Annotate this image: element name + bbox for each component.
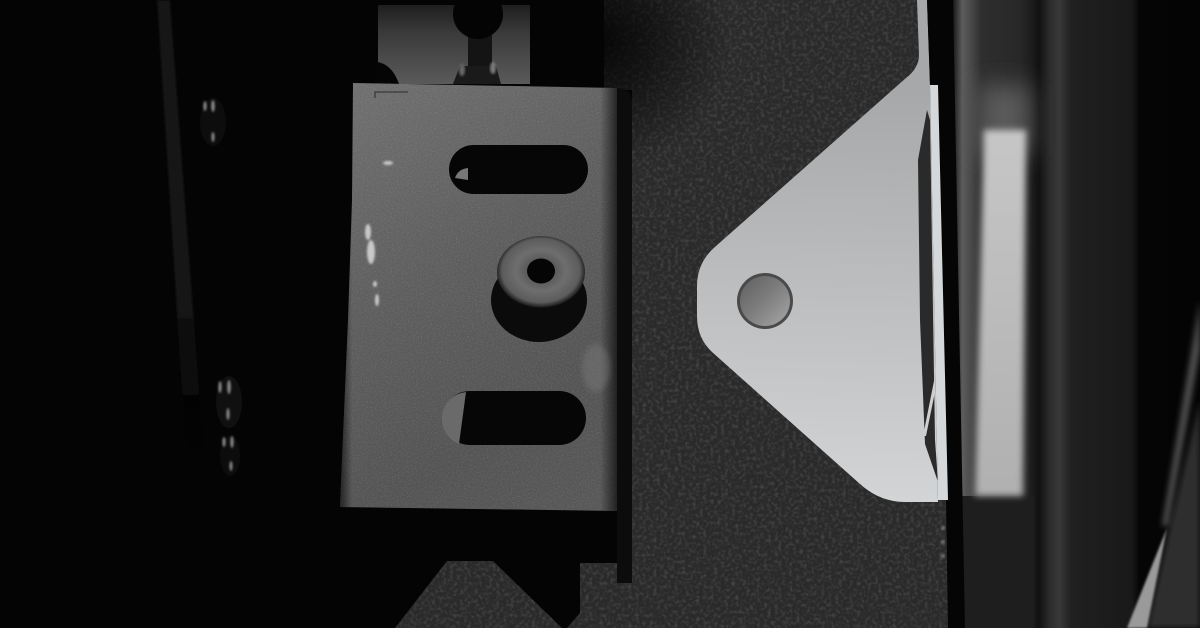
folded silver edge	[930, 85, 948, 500]
bracket face	[335, 80, 625, 515]
textured wall	[390, 0, 950, 628]
plate recess	[918, 110, 938, 482]
silver triangular plate	[697, 0, 938, 502]
black bracket: main plate	[340, 83, 625, 511]
column lower dim area	[958, 496, 1034, 628]
upper slot	[449, 145, 588, 194]
black shadow and lower bracket tab	[0, 0, 632, 628]
column highlight panel	[975, 130, 1026, 496]
right vertical column	[948, 0, 1200, 628]
rubber bushing	[491, 236, 587, 342]
recess glint	[923, 376, 935, 436]
plate scuff marks	[365, 161, 393, 306]
plate screw	[737, 273, 793, 329]
wall bolt dots	[941, 526, 945, 558]
left rail with bolts	[157, 0, 242, 476]
top mounting plate and threaded rod	[377, 0, 530, 84]
far right light streaks	[1127, 300, 1200, 628]
bracket side flange	[612, 87, 632, 583]
lower slot	[442, 391, 586, 445]
scratch line on plate corner	[375, 92, 408, 98]
column glow above highlight	[978, 85, 1030, 155]
black slanted strip	[927, 0, 965, 628]
